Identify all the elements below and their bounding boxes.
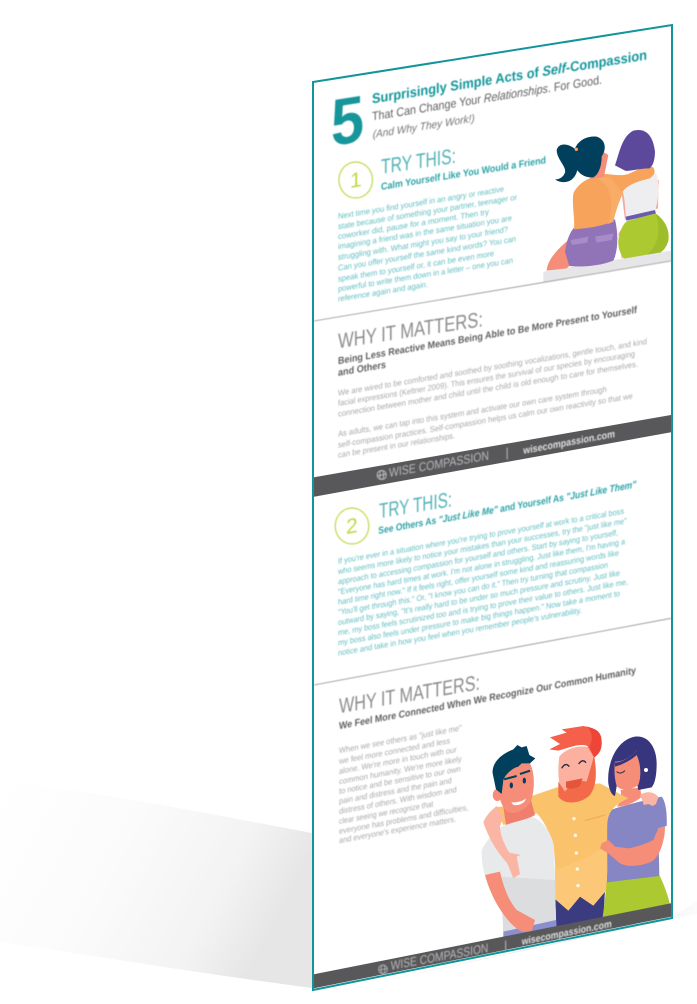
- title: (And Why They Work!): [373, 113, 475, 141]
- try this 1 body: reference again and again.: [338, 280, 428, 304]
- yellow man face: [558, 747, 595, 800]
- shirt shading: [555, 843, 607, 911]
- yellow man hair: [549, 726, 602, 757]
- try this 1 body: powerful to write them down in a letter – one you can: [338, 256, 513, 294]
- try this 2 body: my boss also feels under pressure to make big things happen." Now take a moment to: [338, 589, 620, 648]
- why it matters 2 body: everyone has problems and difficulties,: [339, 803, 468, 836]
- illustration: two friends on a bench: [543, 130, 671, 282]
- why it matters 1 body: self-compassion practices. Self-compassion helps us calm our own reactivity so that we: [338, 391, 633, 450]
- shirt buttons: [572, 817, 580, 887]
- why it matters 1 body: We are wired to be comforted and soothed by soothing vocalizations, gentle touch, and kind: [338, 337, 647, 398]
- try this 2 body: me, my boss feels scrutinized too and is trying to prove their value to others. Just like me,: [338, 577, 628, 637]
- why it matters 1 heading: Being Less Reactive Means Being Able to Be More Present to Yourself: [338, 305, 638, 367]
- why it matters 2 heading: WHY IT MATTERS:: [339, 671, 480, 718]
- title: [372, 47, 647, 141]
- why it matters 2 body: alone. We're more in touch with our: [339, 745, 457, 776]
- yellow man beard: [558, 755, 596, 803]
- number circle 2: [335, 508, 369, 544]
- icon: globe logo: [377, 470, 386, 480]
- text layer: [314, 47, 671, 974]
- try this 1 body: [338, 185, 517, 304]
- try this 2 body: If you're ever in a situation where you're trying to prove yourself at work to a critical boss: [338, 507, 624, 566]
- left man jeans: [503, 917, 558, 942]
- try this 1 body: Next time you find yourself in an angry or reactive: [338, 185, 504, 221]
- yellow man eyes: [562, 761, 586, 768]
- big number 5: 5: [331, 82, 364, 161]
- left man arm: [485, 872, 535, 932]
- teal paper border: [313, 25, 672, 990]
- why it matters 1 body: can be present in our relationships.: [338, 431, 455, 460]
- paper sheet: [313, 25, 672, 990]
- dark pants: [555, 890, 605, 928]
- divider 1: [314, 261, 671, 321]
- try this 1 body: speak them to yourself or, it can be even more: [338, 249, 494, 284]
- why it matters 2 body: we feel more connected and less: [338, 736, 450, 766]
- footer 2 text: wisecompassion.com: [521, 919, 612, 948]
- number circle 1: 1: [350, 168, 362, 193]
- why it matters 2 heading: We Feel More Connected When We Recognize Our Common Humanity: [339, 665, 636, 732]
- right woman arm: [600, 827, 665, 866]
- footer band 1: [314, 415, 671, 497]
- try this 2 heading: See Others As "Just Like Me" and Yourself As "Just Like Them": [378, 480, 636, 537]
- try this 1 body: state because of something your partner, teenager or: [338, 193, 517, 231]
- try this 2 body: who seems more likely to notice your mistakes than your successes, try the "just like me": [337, 516, 627, 576]
- why it matters 2 body: [338, 724, 468, 845]
- left man features: [504, 771, 530, 779]
- try this 1 body: struggling with. What might you say to your friend?: [338, 225, 508, 262]
- left man hair: [493, 745, 535, 794]
- title: That Can Change Your Relationships. For Good.: [372, 73, 602, 123]
- try this 2 body: hard time right now." If it feels right, offer yourself some kind and reassuring words like: [338, 548, 619, 607]
- why it matters 1 body: As adults, we can tap into this system and activate our own care system through: [338, 385, 607, 439]
- footer 2 text: |: [504, 937, 507, 953]
- title: Surprisingly Simple Acts of Self-Compassion: [372, 47, 647, 106]
- why it matters 2 body: pain and distress and the pain and: [339, 776, 452, 806]
- icon: globe logo: [379, 965, 387, 974]
- footer 1 text: WISE COMPASSION: [389, 449, 489, 480]
- right floor shadow: [345, 901, 697, 989]
- why it matters 2 body: to notice and be sensitive to our own: [339, 764, 461, 796]
- try this 2 body: notice and take in how you feel when you remember people's vulnerability.: [338, 606, 582, 658]
- why it matters 1 body: [338, 337, 647, 460]
- right woman face: [614, 750, 641, 790]
- why it matters 2 body: clear seeing we recognize that: [339, 799, 434, 826]
- number circle 2: 2: [346, 514, 358, 539]
- try this 2 body: "You'll get through this." Or, "I know you can do it." Then try turning that compassion: [338, 560, 608, 617]
- try this 1 body: Can you offer yourself the same kind words? You can: [338, 234, 516, 273]
- footer 1 text: |: [506, 446, 509, 460]
- purple top: [606, 797, 667, 882]
- green skirt: [603, 875, 670, 917]
- right woman neck: [617, 787, 642, 807]
- number circle 1: [339, 162, 373, 198]
- yellow shirt: [495, 783, 628, 911]
- why it matters 2 body: distress of others. With wisdom and: [339, 785, 457, 816]
- try this 1 body: imagining a friend was in the same situation you are: [338, 214, 512, 251]
- left floor shadow: [0, 782, 312, 988]
- why it matters 1 body: facial expressions (Keltner 2009). This ensures the survival of our species by encouraging: [338, 349, 635, 408]
- why it matters 1 heading: and Others: [338, 360, 386, 379]
- footer 2 text: [379, 919, 612, 974]
- why it matters 2 body: and everyone's experience matters.: [339, 815, 456, 845]
- illustration: three friends embracing: [482, 726, 670, 942]
- left man neck and face: [503, 797, 535, 825]
- footer band 2: [314, 903, 671, 988]
- why it matters 1 body: connection between mother and child until the child is old enough to care for themselves.: [338, 360, 638, 419]
- try this 1 heading: TRY THIS:: [381, 145, 456, 179]
- footer 1 text: wisecompassion.com: [522, 429, 615, 457]
- right woman hair back: [608, 737, 657, 796]
- try this 2 body: [337, 507, 628, 658]
- why it matters 1 heading: WHY IT MATTERS:: [338, 308, 483, 353]
- try this 2 body: approach to accessing compassion for yourself and others. Start by saying to yourself,: [338, 528, 618, 586]
- try this 2 heading: TRY THIS:: [379, 488, 452, 523]
- try this 2 body: "Everyone has hard times at work. I'm not alone in struggling. Just like them, I'm having a: [338, 537, 625, 597]
- try this 2 body: outward by saying, "It's really hard to be under so much pressure and scrutiny. Just like: [338, 569, 620, 627]
- why it matters 2 body: common humanity. We're more likely: [339, 754, 462, 786]
- yellow man arm: [483, 806, 521, 878]
- try this 1 heading: Calm Yourself Like You Would a Friend: [381, 155, 546, 193]
- why it matters 2 body: When we see others as "just like me": [339, 724, 462, 755]
- hand on shoulder: [640, 792, 658, 806]
- footer 1 text: [377, 429, 615, 480]
- footer 2 text: WISE COMPASSION: [391, 941, 488, 973]
- try this 1 body: coworker did, pause for a moment. Then try: [338, 207, 490, 241]
- divider 2: [314, 618, 671, 685]
- white shirt: [482, 816, 555, 882]
